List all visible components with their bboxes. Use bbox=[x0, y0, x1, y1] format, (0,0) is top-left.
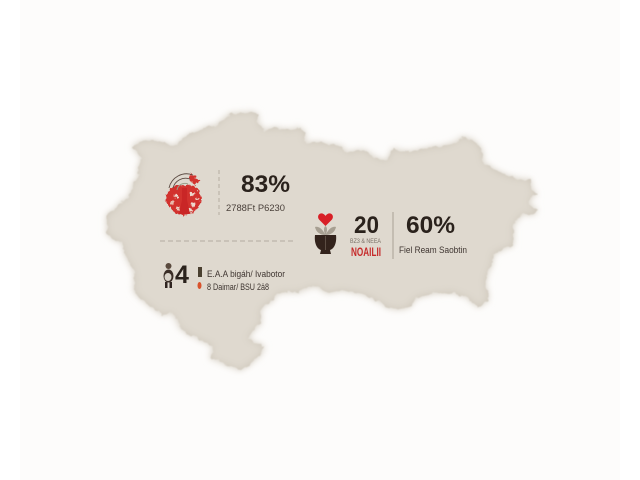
icon: heart and bowl bbox=[315, 213, 336, 254]
vertical divider bbox=[392, 212, 394, 259]
stat: 60%: 60% bbox=[406, 212, 455, 239]
horizontal dashed divider bbox=[160, 240, 296, 242]
caption: 20 red: NOAILII bbox=[351, 245, 381, 259]
legend text: first line: E.A.A bigáh/ Ivabotor bbox=[207, 269, 285, 279]
legend marker: red dot bbox=[198, 282, 202, 289]
map silhouette bbox=[107, 112, 537, 370]
caption: 20 small: BZ3 & NEEA bbox=[350, 238, 382, 245]
icon: red tree emblem bbox=[166, 174, 201, 215]
legend text: second line: 8 Daimar/ BSU 2ä8 bbox=[207, 282, 269, 292]
caption: 60%: Fiel Ream Saobtin bbox=[399, 245, 467, 255]
stat: 4: 4 bbox=[175, 261, 189, 289]
stat: 20: 20 bbox=[354, 212, 379, 239]
legend marker: dark bar bbox=[198, 267, 202, 277]
stat: 83%: 83% bbox=[241, 171, 290, 198]
vertical dashed divider bbox=[218, 170, 220, 215]
caption: 83%: 2788Ft P6230 bbox=[226, 203, 285, 213]
icon: figure bbox=[164, 263, 174, 288]
